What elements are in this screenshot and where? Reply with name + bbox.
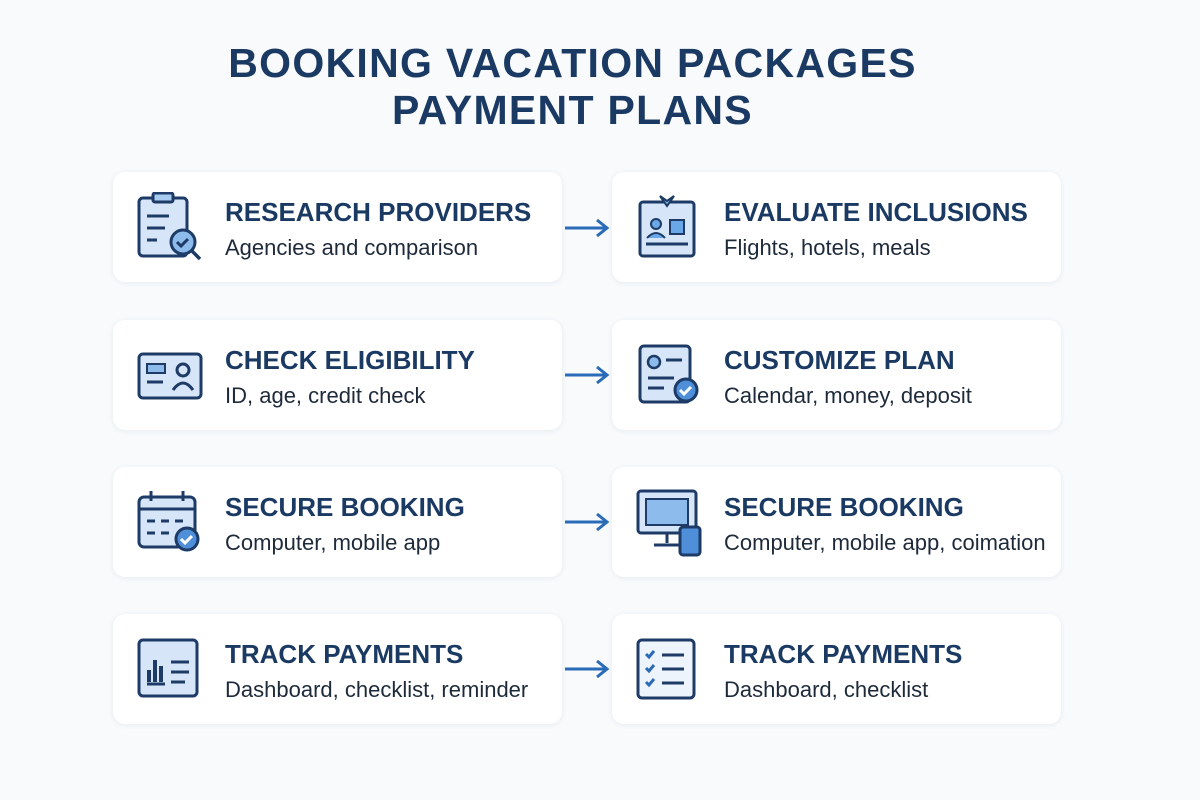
icon: id card — [138, 352, 202, 400]
card: research providers: Agencies and comparison — [225, 235, 478, 260]
icon: clipboard magnifier — [138, 192, 202, 260]
card: track payments 1: TRACK PAYMENTS — [225, 639, 463, 669]
title: PAYMENT PLANS — [392, 87, 753, 133]
card: check eligibility: ID, age, credit check — [225, 383, 426, 408]
card: check eligibility: CHECK ELIGIBILITY — [225, 345, 475, 375]
card: secure booking 1 — [113, 467, 562, 577]
card: secure booking 2: SECURE BOOKING — [724, 492, 964, 522]
card: check eligibility — [113, 320, 562, 430]
card: secure booking 1: Computer, mobile app — [225, 530, 440, 555]
icon: travel board — [638, 195, 696, 258]
arrow 2 — [565, 366, 610, 384]
arrow 1 — [565, 218, 610, 238]
title: BOOKING VACATION PACKAGES — [228, 40, 917, 86]
card: secure booking 1: SECURE BOOKING — [225, 492, 465, 522]
card: track payments 2: TRACK PAYMENTS — [724, 639, 962, 669]
icon: checklist — [636, 638, 696, 700]
card: track payments 2 — [612, 614, 1061, 724]
card: secure booking 2 — [612, 467, 1061, 577]
arrow 4 — [565, 660, 610, 678]
title — [228, 40, 917, 133]
icon: profile form check — [638, 344, 698, 404]
card: research providers: RESEARCH PROVIDERS — [225, 197, 531, 227]
card: customize plan: CUSTOMIZE PLAN — [724, 345, 955, 375]
card: customize plan — [612, 320, 1061, 430]
card: evaluate inclusions: Flights, hotels, meals — [724, 235, 931, 260]
card: track payments 1: Dashboard, checklist, reminder — [225, 677, 528, 702]
arrow 3 — [565, 512, 610, 532]
card: research providers — [113, 172, 562, 282]
card: track payments 1 — [113, 614, 562, 724]
card: secure booking 2: Computer, mobile app, coimation — [724, 530, 1046, 555]
card: evaluate inclusions: EVALUATE INCLUSIONS — [724, 197, 1028, 227]
card: evaluate inclusions — [612, 172, 1061, 282]
card: customize plan: Calendar, money, deposit — [724, 383, 972, 408]
icon: calendar check — [138, 491, 200, 552]
icon: computer and phone — [636, 490, 702, 556]
icon: dashboard chart — [138, 638, 198, 698]
card: track payments 2: Dashboard, checklist — [724, 677, 928, 702]
